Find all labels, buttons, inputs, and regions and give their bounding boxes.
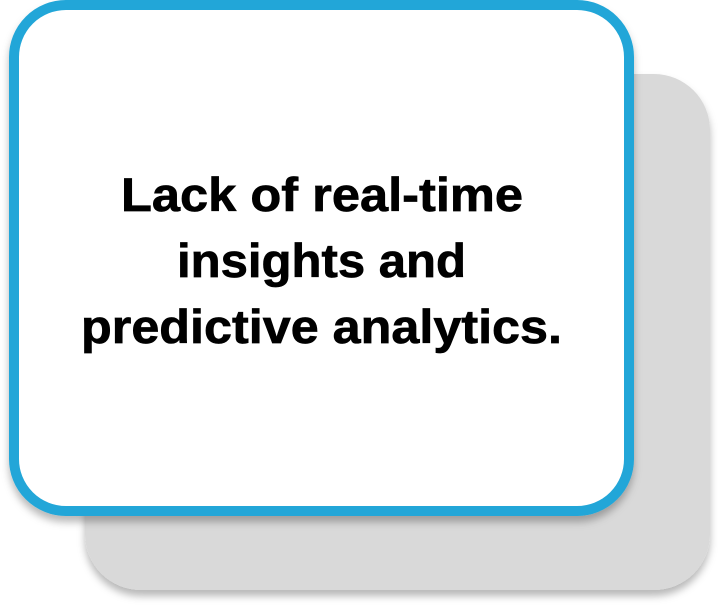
front panel: white card with blue border [14, 5, 629, 511]
statement text [81, 169, 562, 354]
statement text: predictive analytics. [81, 301, 562, 354]
statement text: Lack of real-time [121, 169, 523, 222]
back panel: grey card [85, 74, 710, 590]
statement text: insights and [177, 235, 466, 288]
